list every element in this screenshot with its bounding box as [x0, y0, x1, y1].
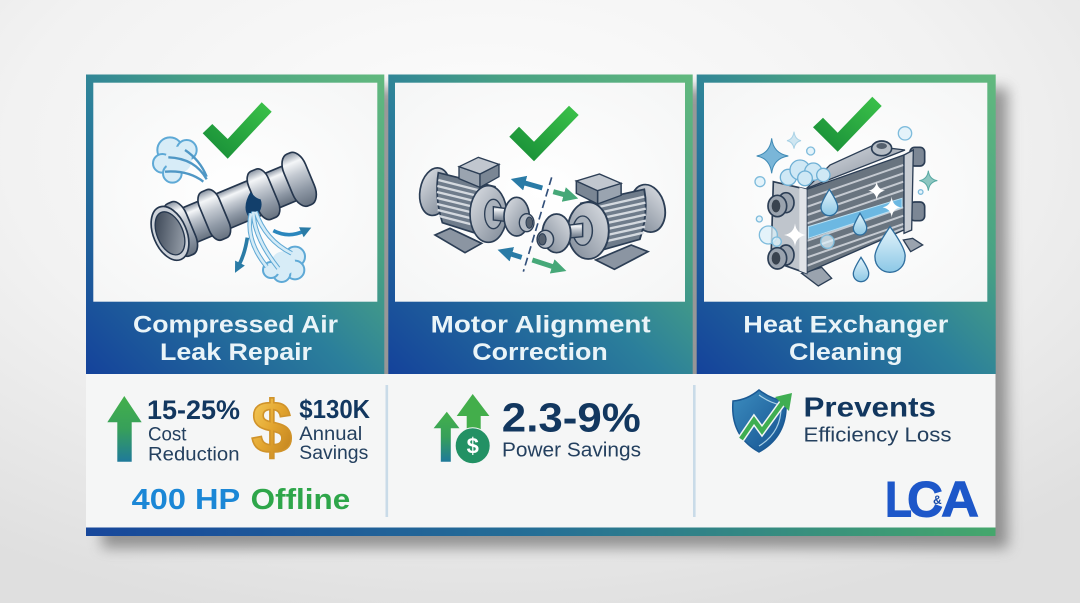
stats: heat exchanger cleaning — [733, 390, 979, 528]
callout: 400 HP offline: 400 HP — [132, 484, 240, 516]
heading: Compressed Air — [133, 312, 339, 339]
illustration background — [395, 83, 685, 302]
panel: heat exchanger cleaning — [697, 74, 996, 374]
heading: Cleaning — [789, 339, 902, 366]
icon: up arrow — [107, 396, 142, 462]
board shadow — [102, 88, 1008, 548]
alignment arrows — [509, 182, 567, 267]
callout: 400 HP offline — [132, 484, 350, 516]
panel frame and title band — [697, 74, 996, 374]
panel: compressed air leak repair — [86, 74, 384, 374]
icon: shield with rising arrow — [733, 390, 792, 452]
stat: cost reduction: Reduction — [148, 445, 240, 466]
stat: prevents efficiency loss: Efficiency Loss — [804, 425, 952, 447]
panel frame and title band — [86, 74, 384, 374]
foam — [780, 160, 830, 186]
lower stats panel background — [86, 374, 996, 536]
stat: cost reduction: 15-25% — [147, 395, 240, 425]
stat: cost reduction — [147, 395, 240, 466]
icon: arrows with dollar coin — [434, 394, 490, 464]
bottom gradient stripe — [86, 528, 996, 536]
water droplets — [821, 189, 905, 282]
arrow right — [273, 231, 303, 235]
icon: heat exchanger — [755, 127, 937, 286]
bubbles — [755, 127, 923, 248]
stats: compressed air leak repair — [107, 386, 370, 516]
leak flame crack — [245, 192, 262, 217]
callout: 400 HP offline: Offline — [251, 484, 350, 516]
water band — [808, 198, 902, 238]
stat: power savings — [502, 395, 641, 462]
stats: motor alignment correction — [434, 394, 641, 464]
stat: annual savings: Savings — [299, 443, 368, 464]
stat: annual savings: $130K — [299, 394, 370, 424]
illustration background — [704, 83, 987, 302]
right tank — [904, 150, 913, 233]
stat: power savings: 2.3-9% — [502, 395, 641, 441]
alignment dashed line — [523, 177, 552, 272]
stat: cost reduction: Cost — [148, 425, 187, 446]
air cloud upper left — [153, 137, 197, 183]
mounting feet — [802, 267, 832, 286]
logo: LC&A: L — [885, 472, 912, 528]
logo: LC&A: A — [941, 472, 979, 528]
left tank — [771, 182, 807, 273]
icon: green check mark — [509, 106, 579, 161]
icon: misaligned motors — [416, 157, 669, 272]
heading: Motor Alignment — [431, 312, 651, 339]
arrow down — [239, 238, 247, 265]
icon: arrows with dollar coin: $ — [467, 434, 479, 458]
icon: green check mark — [813, 97, 882, 152]
stat: prevents efficiency loss: Prevents — [804, 392, 936, 423]
ports — [768, 193, 794, 269]
top plate — [807, 146, 905, 188]
stat: annual savings — [299, 394, 370, 464]
illustration background — [93, 83, 377, 302]
right ports — [910, 147, 925, 166]
stat: power savings: Power Savings — [502, 440, 641, 462]
heading — [743, 312, 949, 366]
heading — [431, 312, 651, 366]
heading: Leak Repair — [160, 339, 313, 366]
heading: Heat Exchanger — [743, 312, 949, 339]
panel: motor alignment correction — [388, 74, 693, 374]
stat: annual savings: Annual — [299, 424, 362, 445]
icon: green check mark — [203, 102, 272, 159]
logo: LC&A — [885, 472, 979, 528]
panel frame and title band — [388, 74, 693, 374]
logo: LC&A: & — [933, 493, 942, 507]
stat: prevents efficiency loss — [804, 392, 952, 447]
heading — [133, 312, 339, 366]
logo: LC&A: C — [907, 472, 943, 528]
icon: gold dollar sign: $ — [251, 386, 292, 469]
icon: leaking pipe — [144, 137, 321, 282]
heading: Correction — [472, 339, 608, 366]
sparkles — [757, 132, 937, 191]
core fins — [807, 155, 904, 273]
air cloud lower right — [263, 247, 305, 282]
